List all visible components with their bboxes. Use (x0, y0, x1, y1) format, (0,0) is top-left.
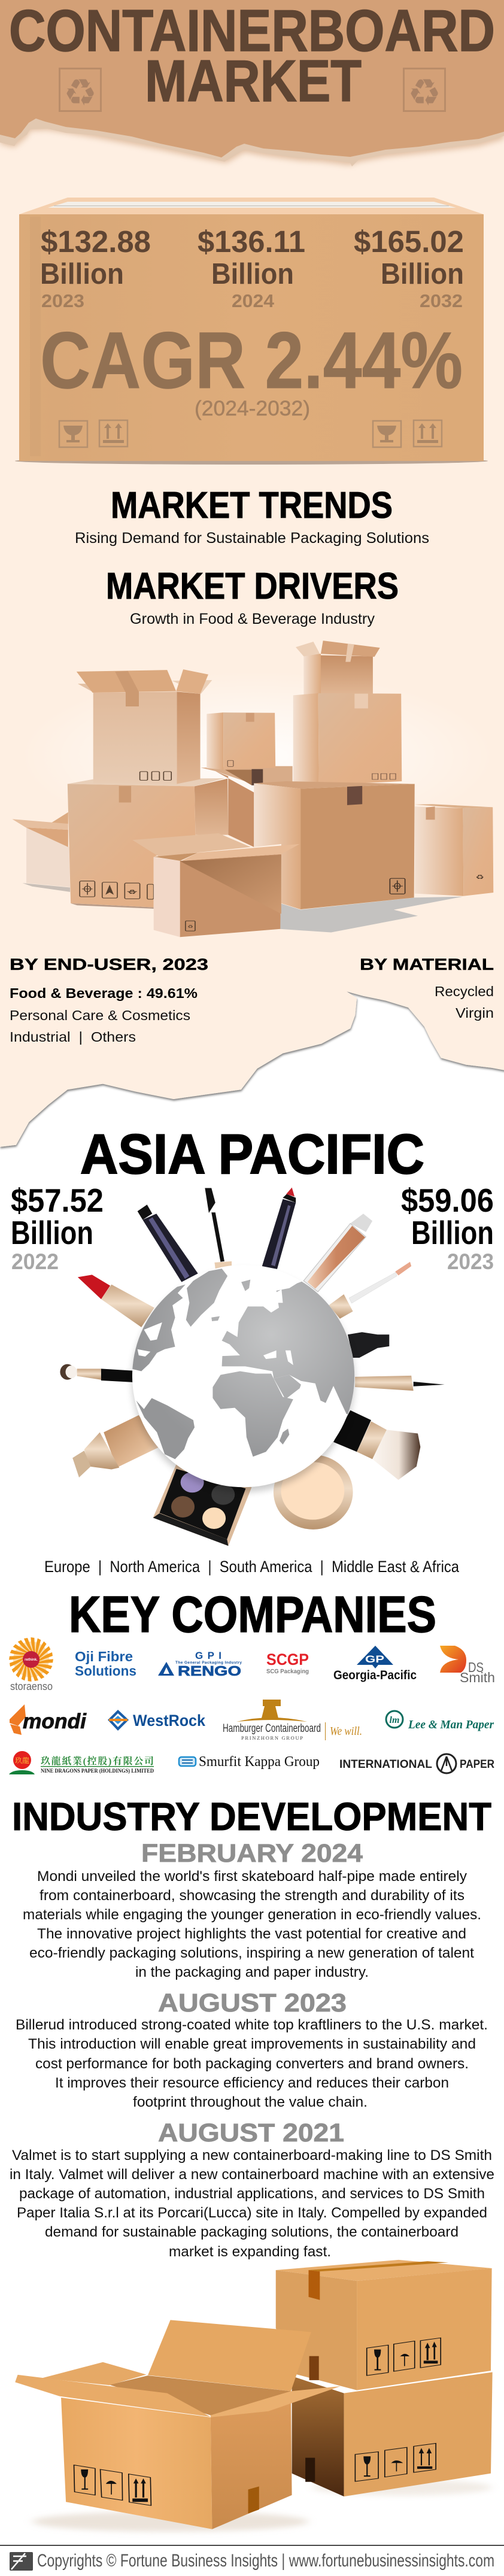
box: far right (415, 804, 493, 896)
logo: stora enso: storaenso (10, 1680, 53, 1692)
icon: eyeliner pen (355, 1376, 445, 1391)
logo: mondi: mondi (23, 1710, 87, 1733)
logo: gpi rengo: The General Packaging Industry (175, 1661, 242, 1665)
logo: hamburger containerboard: We will. (330, 1725, 362, 1738)
logo: ds smith (440, 1646, 495, 1685)
heading: BY MATERIAL (360, 955, 494, 973)
date heading: FEBRUARY 2024 (141, 1839, 363, 1868)
body text: materials while engaging the younger generation in eco-friendly values. (23, 1907, 481, 1923)
heading: key companies: KEY COMPANIES (69, 1586, 436, 1643)
box: lower stacked (292, 2372, 493, 2496)
panel: february 2024 development (23, 1839, 481, 1980)
CAGR period: (2024-2032) (195, 397, 310, 420)
body text: in the packaging and paper industry. (135, 1964, 369, 1980)
stat: 2032 (354, 224, 464, 311)
title: MARKET (145, 48, 362, 114)
stat: 2022 (11, 1182, 104, 1274)
stat: 2023 (401, 1182, 494, 1274)
logo: international paper (339, 1754, 494, 1773)
box: big front right (254, 781, 415, 909)
box: upper right open (296, 641, 380, 694)
logo: nine dragons paper (9, 1751, 154, 1774)
body text: It improves their resource efficiency and reduces their carbon (55, 2075, 449, 2091)
segment: Recycled (435, 984, 494, 999)
icon: applicator (329, 1262, 411, 1319)
box: small middle (207, 712, 275, 770)
body text: from containerboard, showcasing the strength and durability of its (40, 1888, 464, 1904)
icon: large brush (333, 1410, 420, 1480)
logo: mondi (10, 1704, 87, 1735)
box: lower left large: ♻ (127, 889, 136, 896)
logo: international paper: PAPER (460, 1758, 494, 1771)
logo: georgia-pacific (333, 1646, 417, 1682)
body text: Billerud introduced strong-coated white top kraftliners to the U.S. market. (16, 2017, 488, 2033)
logo: international paper: INTERNATIONAL (339, 1758, 432, 1771)
logo: ds smith: Smith (460, 1670, 495, 1685)
box: front open (132, 833, 299, 937)
body text: in Italy. Valmet will deliver a new containerboard machine with an extensive (10, 2167, 494, 2183)
box: front open (15, 2320, 341, 2529)
panel: cardboard box with market size (15, 198, 488, 465)
heading: market trends: MARKET TRENDS (111, 485, 393, 526)
icon: powder compact (274, 1455, 353, 1530)
logo: ds smith: DS (468, 1659, 484, 1675)
torn paper edge (0, 119, 504, 166)
stat: 2023: Billion (40, 258, 124, 290)
stat: 2032: 2032 (420, 290, 463, 311)
icon: mascara tube (138, 1204, 198, 1282)
icon: mascara wand (205, 1188, 232, 1269)
logo: nine dragons paper: 玖龍紙業(控股)有限公司 (41, 1755, 154, 1767)
logo: hamburger containerboard: PRINZHORN GROUP (241, 1735, 303, 1741)
segment: Virgin (456, 1005, 494, 1021)
segment: Personal Care & Cosmetics (10, 1008, 190, 1023)
icon: foundation bottle (72, 1415, 159, 1477)
logo: smurfit kappa: Smurfit Kappa Group (199, 1754, 320, 1770)
box: far left open (12, 812, 70, 887)
box lid (19, 198, 484, 214)
box: lower left large (68, 778, 228, 908)
title (9, 0, 495, 114)
text: other regions: Europe | North America | South America | Middle East & Africa (44, 1558, 460, 1576)
panel: company logos (8, 1637, 495, 1774)
body text: The innovative project highlights the vast potential for creative and (37, 1926, 466, 1942)
illustration: stack of cardboard boxes (12, 641, 495, 937)
box: far right: ♻ (476, 874, 484, 881)
box: upper left open (77, 669, 212, 784)
date heading: AUGUST 2021 (158, 2119, 344, 2147)
icon: recycle left: ♻ (63, 71, 97, 114)
panel: header torn cardboard (0, 0, 504, 166)
box front (19, 214, 484, 461)
logo: stora enso: rethink. (25, 1658, 38, 1662)
logo: lee and man paper: lm (390, 1715, 399, 1725)
icon: eyeliner bottle (348, 1332, 389, 1358)
stat: 2022: 2022 (11, 1249, 59, 1274)
body text (10, 2147, 494, 2260)
stat: 2023: 2023 (447, 1249, 494, 1274)
body text (16, 2017, 488, 2110)
box: back middle (201, 766, 293, 847)
heading: market drivers: MARKET DRIVERS (106, 566, 399, 607)
stat: 2023 (40, 224, 151, 311)
icon: lip gloss (303, 1213, 372, 1292)
body text: footprint throughout the value chain. (133, 2094, 368, 2110)
body text: Valmet is to start supplying a new containerboard-making line to DS Smith (12, 2147, 492, 2164)
header cardboard (0, 0, 504, 157)
segment: Industrial | Others (10, 1029, 136, 1045)
body text: cost performance for both packaging converters and brand owners. (35, 2056, 469, 2072)
logo: hamburger containerboard: Hamburger Containerboard (223, 1722, 321, 1735)
icons: handling marks (59, 420, 442, 447)
logo: scgp: SCGP (266, 1650, 309, 1668)
panel: august 2021 development (10, 2119, 494, 2260)
logo: westrock (108, 1710, 206, 1731)
logo: georgia-pacific: GP (365, 1653, 384, 1665)
logo: gpi rengo: GPI (195, 1650, 221, 1661)
stat: 2022: Billion (11, 1214, 93, 1251)
icon: fortune business insights logo (10, 2552, 33, 2571)
stat: 2024: Billion (211, 258, 294, 290)
stat: 2023: $132.88 (41, 224, 151, 259)
box shadow (15, 457, 488, 465)
stat: 2024: 2024 (232, 290, 275, 311)
body text: This introduction will enable great improvements in sustainability and (28, 2036, 476, 2052)
stat: 2023: 2023 (41, 290, 84, 311)
body text: demand for sustainable packaging solutions, the containerboard (45, 2224, 459, 2240)
body text: Paper Italia S.r.l at its Porcari(Lucca) site in Italy. Compelled by expanded (17, 2205, 487, 2221)
date heading: AUGUST 2023 (158, 1989, 347, 2017)
logo: oji fibre solutions: Solutions (75, 1663, 136, 1679)
body text (23, 1868, 481, 1980)
stat: 2032: $165.02 (354, 224, 464, 259)
logo: stora enso (8, 1637, 54, 1692)
logo: gpi rengo (158, 1650, 242, 1679)
logo: westrock: WestRock (133, 1712, 206, 1730)
panel: august 2023 development (16, 1989, 488, 2110)
stat: 2032: Billion (381, 258, 464, 290)
text: market trend: Rising Demand for Sustainable Packaging Solutions (75, 530, 429, 547)
heading: asia pacific: ASIA PACIFIC (80, 1122, 424, 1185)
logo: lee and man paper (386, 1711, 494, 1731)
logo: nine dragons paper: NINE DRAGONS PAPER (HOLDINGS) LIMITED (41, 1768, 154, 1774)
logo: scgp (266, 1650, 309, 1675)
box: upper stacked (276, 2260, 493, 2390)
box: right stacked (293, 693, 402, 785)
body text: Mondi unveiled the world's first skateboard half-pipe made entirely (37, 1868, 467, 1885)
icon: eye pencil (262, 1188, 296, 1269)
panel: by end-user (10, 955, 208, 1045)
text: market driver: Growth in Food & Beverage Industry (130, 611, 375, 627)
leading segment: Food & Beverage : 49.61% (10, 985, 198, 1001)
illustration: bottom cardboard boxes (15, 2260, 493, 2532)
stat: 2024: $136.11 (198, 224, 305, 259)
illustration: globe with cosmetics (60, 1188, 445, 1546)
body text: eco-friendly packaging solutions, inspiring a new generation of talent (29, 1945, 474, 1961)
logo: scgp: SCG Packaging (266, 1668, 309, 1675)
stat: 2022: $57.52 (11, 1182, 104, 1219)
body text: package of automation, industrial applications, and services to DS Smith (19, 2186, 485, 2202)
box: front open: ♻ (187, 925, 193, 929)
logo: oji fibre solutions (75, 1649, 136, 1679)
panel: footer (0, 2545, 504, 2571)
heading: BY END-USER, 2023 (10, 955, 208, 973)
logo: gpi rengo: RENGO (178, 1663, 241, 1679)
logo: nine dragons paper: 玖龍 (15, 1755, 29, 1765)
logo: georgia-pacific: Georgia-Pacific (333, 1668, 417, 1682)
panel: by material (360, 955, 494, 1021)
body text: market is expanding fast. (169, 2244, 331, 2260)
icon: eyeshadow palette (153, 1464, 251, 1546)
logo: oji fibre solutions: Oji Fibre (75, 1649, 133, 1664)
logo: hamburger containerboard (223, 1700, 362, 1741)
globe (131, 1265, 359, 1487)
icon: lipstick (78, 1275, 154, 1327)
stat: 2024 (198, 224, 305, 311)
icon: small brush (60, 1364, 133, 1382)
stat: 2023: $59.06 (401, 1182, 494, 1219)
panel: peach market summary background with torn edge (0, 0, 504, 1147)
icon: recycle right: ♻ (408, 71, 441, 114)
logo: lee and man paper: Lee & Man Paper (408, 1718, 494, 1731)
